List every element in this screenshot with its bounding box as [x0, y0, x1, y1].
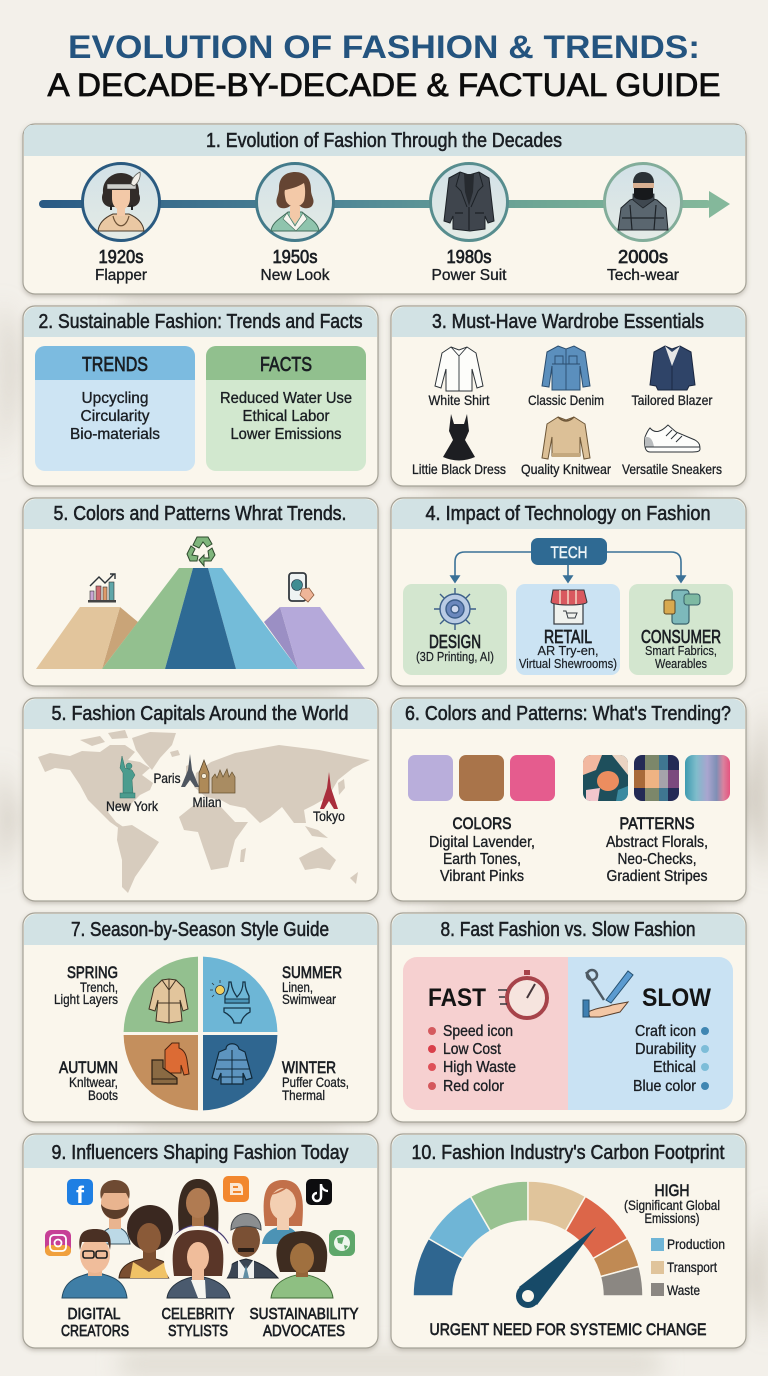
heading capitals: 5. Fashion Capitals Around the World [52, 703, 348, 725]
influencer labels: SUSTAINABILITY [250, 1306, 359, 1323]
icon: blogger [223, 1176, 249, 1202]
pattern: abstract florals [583, 755, 628, 801]
design card [403, 584, 507, 675]
label 2000s [607, 247, 680, 284]
icon: sun and swimwear [210, 980, 250, 1023]
landmark: statue of liberty [120, 756, 135, 798]
icon: globe [329, 1230, 355, 1256]
icon: quality knitwear [542, 417, 590, 459]
colors list: Earth Tones, [443, 851, 521, 868]
colors list [429, 814, 535, 885]
essentials labels: Versatile Sneakers [622, 461, 722, 477]
comparison background [403, 957, 733, 1110]
pattern: gradient stripes [685, 755, 730, 801]
label milan: Milan [192, 794, 222, 810]
icon: instagram [45, 1230, 71, 1256]
influencer labels: CELEBRITY [162, 1306, 235, 1323]
icon: little black dress [443, 414, 475, 460]
panel: fashion capitals map [23, 698, 378, 901]
panel: 8 fast vs slow [391, 913, 746, 1122]
label autumn: Boots [88, 1087, 118, 1103]
fast column [428, 970, 547, 1095]
icon: trench coat [149, 979, 188, 1023]
label 1950s [260, 247, 330, 284]
label summer [282, 963, 342, 1007]
label 2000s: Tech-wear [607, 267, 680, 284]
facts card [206, 346, 366, 471]
heading 9: 9. Influencers Shaping Fashion Today [52, 1142, 348, 1164]
label 1950s: 1950s [272, 247, 318, 267]
heading 3: 3. Must-Have Wardrobe Essentials [432, 311, 704, 333]
icon: white shirt [435, 347, 483, 391]
heading 8: 8. Fast Fashion vs. Slow Fashion [440, 919, 696, 941]
panel: 7 season guide [23, 913, 378, 1122]
callout: urgent need: URGENT NEED FOR SYSTEMIC CHANGE [430, 1320, 706, 1339]
title: EVOLUTION OF FASHION & TRENDS: [68, 29, 700, 65]
panel: 10 carbon footprint [391, 1134, 746, 1348]
gauge needle [516, 1227, 596, 1308]
label paris: Paris [154, 770, 180, 786]
panel: 1 evolution through the decades [23, 124, 746, 294]
label autumn: AUTUMN [59, 1058, 118, 1077]
landmark: milan cathedral [212, 769, 235, 793]
trends card: TRENDS [82, 354, 148, 376]
slow column: Craft icon [635, 1023, 696, 1040]
landmark: big ben [199, 760, 209, 793]
patterns list: PATTERNS [620, 814, 694, 833]
essentials labels: Littie Black Dress [412, 461, 506, 477]
back row: bearded man [98, 1180, 130, 1244]
icon: versatile sneakers [645, 425, 700, 452]
world map [38, 730, 370, 893]
trends card [35, 346, 195, 471]
gauge [413, 1181, 643, 1296]
label tokyo: Tokyo [313, 808, 345, 824]
patterns list: Gradient Stripes [606, 868, 708, 885]
influencer labels [61, 1306, 359, 1340]
essentials labels: Tailored Blazer [632, 392, 713, 408]
heading 1: 1. Evolution of Fashion Through the Decades [206, 130, 562, 152]
icon: puffer jacket [212, 1044, 252, 1084]
heading 7: 7. Season-by-Season Style Guide [71, 919, 329, 941]
front: sustainability advocate [271, 1231, 333, 1298]
influencer labels: CREATORS [61, 1323, 129, 1340]
retail card: RETAIL [544, 627, 592, 647]
facts card: Ethical Labor [242, 408, 330, 425]
label 1980s: Power Suit [432, 267, 507, 284]
icon: stopwatch [498, 970, 547, 1018]
icon: tiktok [306, 1179, 332, 1205]
season pie [124, 957, 277, 1110]
legend [651, 1236, 725, 1298]
front: celebrity stylist [164, 1226, 232, 1298]
label autumn: Knltwear, [69, 1074, 118, 1090]
fast column: Low Cost [443, 1041, 501, 1058]
heading 2: 2. Sustainable Fashion: Trends and Facts [38, 311, 362, 333]
label spring: SPRING [67, 963, 118, 982]
label new york: New York [106, 798, 159, 814]
gauge label high: HIGH [654, 1181, 690, 1200]
fast column: Speed icon [443, 1023, 513, 1040]
colors list: COLORS [452, 814, 512, 833]
fast column: High Waste [443, 1059, 516, 1076]
title: A DECADE-BY-DECADE & FACTUAL GUIDE [48, 67, 720, 103]
essentials labels: Quality Knitwear [521, 461, 611, 477]
retail card: AR Try-en, [538, 643, 598, 658]
influencer labels: DIGITAL [68, 1306, 121, 1323]
icon: recycle [187, 537, 215, 566]
panel: 4 impact of technology [391, 498, 746, 686]
heading 10: 10. Fashion Industry's Carbon Footprint [412, 1142, 725, 1164]
retail card: Virtual Shewrooms) [519, 656, 617, 671]
heading 6: 6. Colors and Patterns: What's Trending? [405, 703, 731, 725]
back row: long hair woman [172, 1179, 228, 1243]
mountain chart [36, 568, 365, 669]
gauge label high [624, 1181, 720, 1226]
label winter [282, 1058, 349, 1103]
middle row: cap man [223, 1214, 278, 1278]
landmark: tokyo tower [320, 772, 338, 809]
retail card [516, 584, 620, 675]
consumer card: Smart Fabrics, [645, 643, 717, 658]
icon: craft tools and hand [583, 970, 633, 1017]
panel: 5 colors and patterns mountains [23, 498, 378, 686]
colors list: Vibrant Pinks [440, 868, 524, 885]
colors list: Digital Lavender, [429, 834, 535, 851]
label 1920s [95, 247, 148, 284]
tech node [531, 538, 607, 565]
icon: tailored blazer [650, 346, 695, 390]
label 1980s: 1980s [446, 247, 492, 267]
label summer: SUMMER [282, 963, 342, 982]
icon: facebook: f [76, 1182, 85, 1209]
trends card: Bio-materials [70, 426, 160, 443]
decade 1950s new look [256, 164, 334, 240]
middle row: afro woman [119, 1205, 173, 1278]
icon: sweater and boots [152, 1043, 189, 1084]
label winter: WINTER [282, 1058, 336, 1077]
design card: (3D Printing, AI) [416, 649, 494, 664]
pattern: neo-checks [634, 755, 679, 801]
patterns list: Abstract Florals, [606, 834, 708, 851]
fast column: FAST [428, 984, 486, 1012]
label 1950s: New Look [260, 267, 330, 284]
gauge label high: (Significant Global [624, 1197, 720, 1213]
tech node: TECH [550, 543, 588, 562]
facts card: Lower Emissions [230, 426, 342, 443]
icon: classic denim [542, 346, 590, 390]
back row: red hair woman [262, 1180, 303, 1244]
essentials labels: White Shirt [428, 392, 490, 408]
label 2000s: 2000s [618, 247, 668, 267]
connector arrows [451, 552, 685, 582]
icon: growth chart [88, 574, 116, 602]
timeline arrow [39, 191, 730, 218]
panel: 9 influencers [23, 1134, 378, 1348]
design card: DESIGN [429, 632, 481, 652]
decade 1980s power suit [430, 164, 508, 240]
consumer card: Wearables [655, 656, 707, 671]
label winter: Thermal [282, 1087, 325, 1103]
fast column: Red color [443, 1078, 505, 1095]
label summer: Swimwear [282, 991, 336, 1007]
label 1980s [432, 247, 507, 284]
slow column: Ethical [653, 1059, 696, 1076]
facts card: FACTS [260, 354, 312, 376]
panel: 2 sustainable fashion [23, 306, 378, 486]
influencer labels: STYLISTS [168, 1323, 228, 1340]
label 1920s: 1920s [98, 247, 144, 267]
slow column: Blue color [633, 1078, 697, 1095]
label spring: Light Layers [54, 991, 118, 1007]
slow column [583, 970, 711, 1095]
influencer labels: ADVOCATES [263, 1323, 345, 1340]
consumer card [629, 584, 733, 675]
label spring: Trench, [80, 979, 118, 995]
trends card: Circularity [80, 408, 150, 425]
gauge label high: Emissions) [644, 1210, 700, 1226]
heading 5: 5. Colors and Patterns Whrat Trends. [54, 503, 346, 525]
heading 4: 4. Impact of Technology on Fashion [426, 503, 710, 525]
icon: facebook [67, 1179, 93, 1209]
label summer: Linen, [282, 979, 313, 995]
label spring [54, 963, 118, 1007]
label autumn [59, 1058, 118, 1103]
slow column: Durability [635, 1041, 696, 1058]
trends card: Upcycling [82, 390, 148, 407]
consumer card: CONSUMER [641, 627, 721, 647]
title [48, 29, 720, 103]
color swatches [408, 755, 555, 801]
icon: phone with hand [289, 573, 314, 602]
decade 2000s tech-wear [604, 164, 682, 240]
decade 1920s flapper [82, 164, 160, 240]
patterns list: Neo-Checks, [618, 851, 696, 868]
landmark: eiffel tower [181, 754, 199, 787]
legend: Waste [667, 1282, 700, 1298]
essentials labels [412, 392, 722, 477]
panel: 6 colors and patterns [391, 698, 746, 901]
essentials labels: Classic Denim [528, 392, 604, 408]
legend: Transport [667, 1259, 717, 1275]
slow column: SLOW [642, 984, 711, 1012]
panel: 3 wardrobe essentials [391, 306, 746, 486]
label 1920s: Flapper [95, 267, 148, 284]
front: digital creator [62, 1229, 127, 1298]
legend: Production [667, 1236, 725, 1252]
patterns list [606, 814, 708, 885]
facts card: Reduced Water Use [220, 390, 352, 407]
label winter: Puffer Coats, [282, 1074, 349, 1090]
